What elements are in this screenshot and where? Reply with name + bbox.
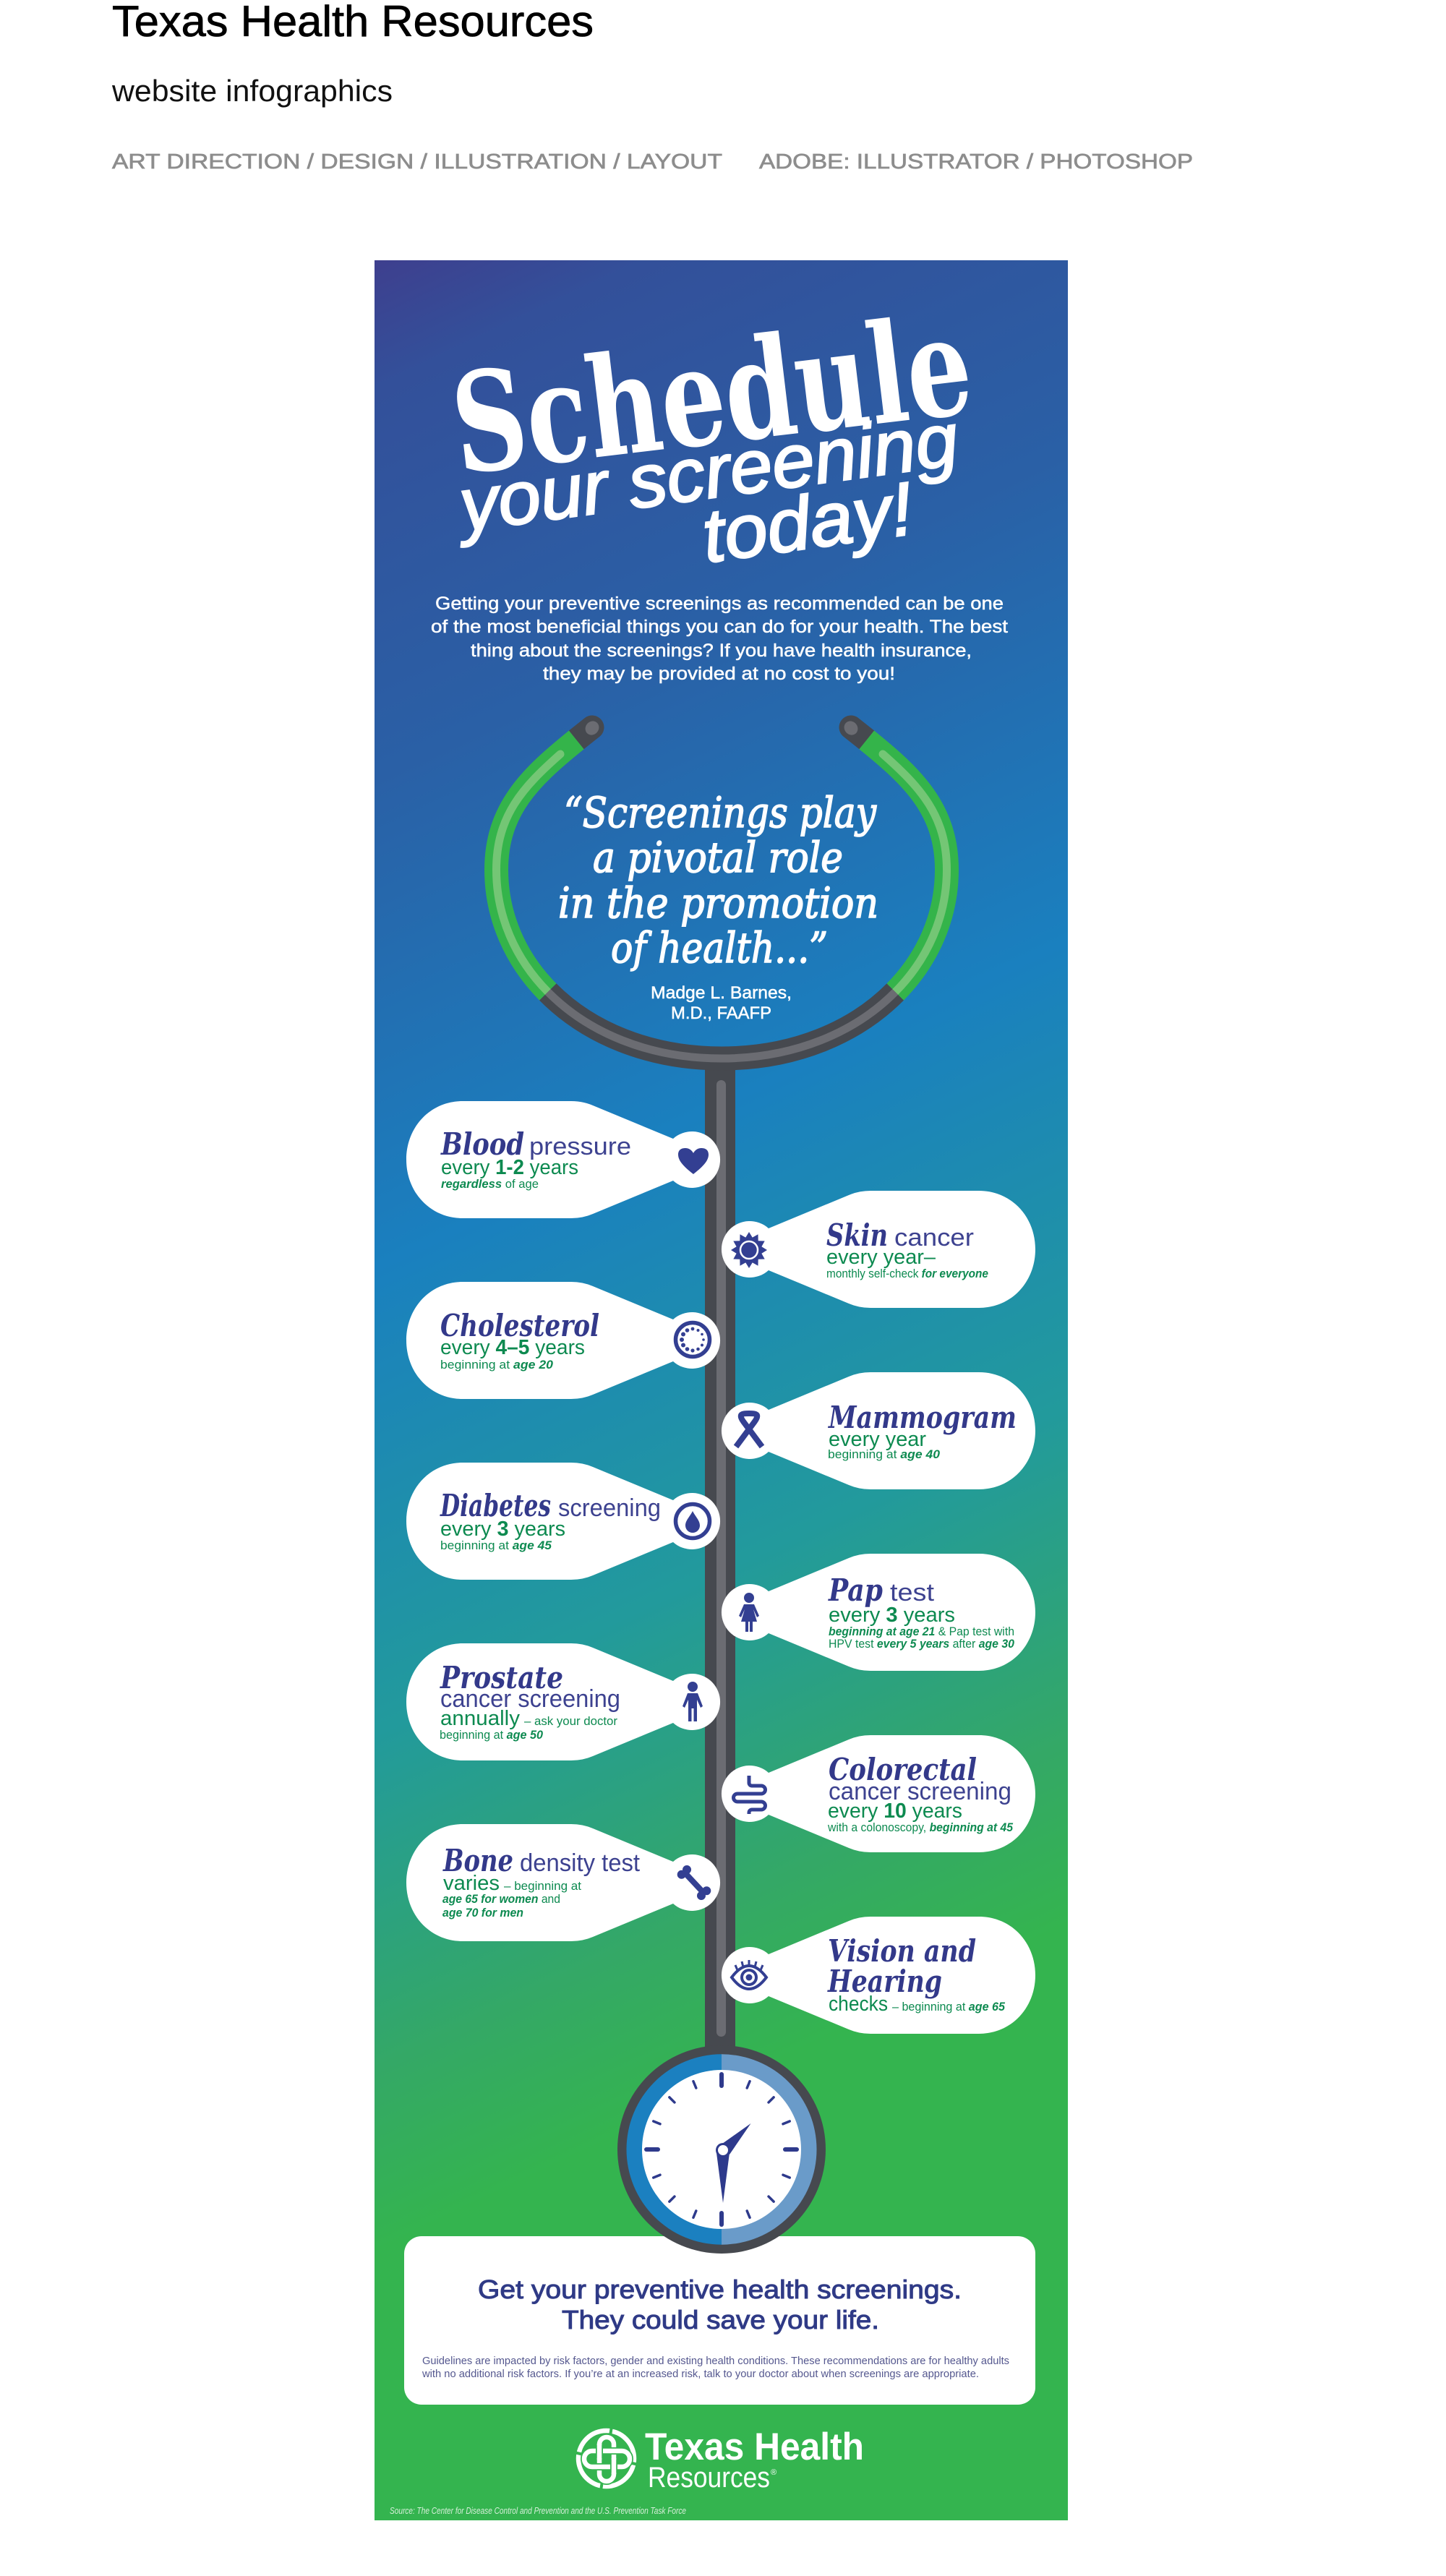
logo mark	[574, 2426, 638, 2491]
panel: Blood pressure	[406, 1101, 720, 1218]
intro paragraph: thing about the screenings? If you have health insurance,	[471, 641, 972, 661]
panel: Skin cancer	[722, 1191, 1035, 1308]
frequency: varies	[443, 1872, 500, 1895]
poster background	[375, 260, 1068, 2520]
icon: heart	[678, 1148, 709, 1174]
age note: with a colonoscopy, beginning at 45	[827, 1820, 1013, 1834]
age note: beginning at age 45	[440, 1539, 552, 1552]
subheading: cancer screening	[440, 1685, 620, 1713]
source note: Source: The Center for Disease Control and Prevention and the U.S. Prevention Task Force	[390, 2505, 686, 2516]
heading: cancer	[894, 1224, 974, 1251]
stethoscope tube	[496, 719, 947, 1058]
stem of stethoscope	[705, 1048, 735, 2061]
heading: Vision and	[828, 1933, 976, 1969]
logo text: ®	[771, 2468, 777, 2477]
heading	[826, 1218, 974, 1253]
panel: Cholesterol	[406, 1282, 720, 1399]
clock	[617, 2045, 826, 2254]
quote attribution: M.D., FAAFP	[671, 1004, 771, 1023]
heading: pressure	[529, 1133, 631, 1160]
headline: Schedule: Schedule	[444, 284, 980, 506]
heading	[442, 1843, 641, 1878]
heading: Colorectal	[829, 1752, 977, 1787]
frequency: – beginning at age 65	[892, 2000, 1006, 2014]
tools line: ADOBE: ILLUSTRATOR / PHOTOSHOP	[759, 150, 1193, 174]
icon: ribbon	[736, 1413, 762, 1447]
subheading: cancer screening	[829, 1778, 1011, 1805]
clock case	[617, 2045, 826, 2254]
heading: Hearing	[827, 1964, 942, 1999]
panel: Diabetes screening	[406, 1463, 720, 1580]
panel: Vision and Hearing	[722, 1917, 1035, 2034]
heading: screening	[558, 1494, 661, 1522]
frequency	[829, 1993, 1006, 2016]
frequency: every year	[829, 1428, 926, 1451]
frequency	[440, 1707, 617, 1730]
heading: Mammogram	[827, 1400, 1017, 1435]
age note: beginning at age 40	[828, 1447, 941, 1461]
clock face	[642, 2070, 801, 2229]
heading: density test	[520, 1849, 641, 1877]
poster headline	[444, 284, 980, 579]
intro paragraph	[431, 594, 1008, 684]
panel: Mammogram	[722, 1372, 1035, 1489]
age note: monthly self-check for everyone	[826, 1267, 988, 1280]
heading: Diabetes	[440, 1488, 551, 1523]
heading: Skin	[826, 1218, 888, 1253]
quote attribution	[651, 983, 792, 1023]
intro paragraph: Getting your preventive screenings as recommended can be one	[435, 594, 1004, 614]
quote: a pivotal role	[593, 833, 843, 882]
frequency: every 1-2 years	[441, 1156, 578, 1179]
clock hands	[716, 2123, 750, 2203]
icon: intestine	[733, 1776, 765, 1814]
quote	[558, 788, 878, 972]
subtitle: website infographics	[111, 74, 393, 108]
intro paragraph: of the most beneficial things you can do for your health. The best	[431, 617, 1008, 637]
icon: bone	[675, 1863, 713, 1902]
frequency	[443, 1872, 581, 1895]
logo text: Resources	[648, 2462, 770, 2494]
card fine print: with no additional risk factors. If you’re at an increased risk, talk to your doctor about when screenings are appropriate.	[422, 2369, 979, 2380]
panel: Prostate cancer screening	[406, 1643, 720, 1760]
age note: HPV test every 5 years after age 30	[829, 1637, 1014, 1651]
icon: blood drop	[675, 1504, 710, 1539]
age note	[829, 1625, 1014, 1651]
clock ticks	[646, 2074, 797, 2225]
heading: test	[890, 1579, 935, 1606]
logo text: Texas Health	[645, 2426, 864, 2468]
age note: beginning at age 50	[440, 1728, 544, 1742]
heading: Blood	[440, 1126, 524, 1162]
right side of tube	[722, 719, 947, 1058]
frequency: every 3 years	[440, 1518, 565, 1541]
frequency: every 4–5 years	[440, 1336, 585, 1359]
panel: Pap test	[722, 1554, 1035, 1671]
heading: Prostate	[440, 1660, 563, 1695]
icon: sun	[731, 1232, 767, 1268]
headline: today: today!	[697, 467, 917, 579]
frequency: annually	[440, 1707, 521, 1730]
age note	[442, 1892, 560, 1920]
frequency: every 3 years	[829, 1604, 955, 1627]
heading: Cholesterol	[440, 1308, 599, 1343]
heading	[828, 1572, 935, 1608]
card heading: Get your preventive health screenings.	[478, 2275, 962, 2304]
card heading	[478, 2275, 962, 2335]
quote: of health...”	[611, 923, 828, 972]
icon: woman	[739, 1593, 759, 1632]
frequency: checks	[829, 1993, 888, 2016]
headline: your screening: your screening	[450, 398, 963, 549]
panel: Bone density test	[406, 1824, 720, 1941]
heading: Bone	[442, 1843, 513, 1878]
left side of tube	[496, 719, 722, 1058]
frequency: every 10 years	[828, 1800, 962, 1823]
logo	[574, 2426, 864, 2494]
age note: age 70 for men	[442, 1906, 523, 1920]
age note: beginning at age 20	[440, 1358, 554, 1372]
frequency: – ask your doctor	[524, 1714, 617, 1728]
icon: eye	[732, 1960, 766, 1989]
frequency: – beginning at	[504, 1879, 581, 1893]
roles line: ART DIRECTION / DESIGN / ILLUSTRATION / LAYOUT	[112, 150, 722, 174]
age note: age 65 for women and	[442, 1892, 560, 1906]
clock ring	[626, 2054, 817, 2245]
icon: cholesterol artery	[675, 1323, 710, 1356]
age note: beginning at age 21 & Pap test with	[829, 1625, 1014, 1638]
quote: “Screenings play	[564, 788, 877, 837]
heading: Pap	[828, 1572, 883, 1608]
card fine print: Guidelines are impacted by risk factors, gender and existing health conditions. These recommendations are for healthy adults	[422, 2355, 1009, 2367]
logo text	[645, 2426, 864, 2494]
heading	[827, 1933, 976, 1999]
quote attribution: Madge L. Barnes,	[651, 983, 792, 1003]
frequency: every year–	[826, 1246, 936, 1269]
quote: in the promotion	[558, 878, 878, 928]
bottom card	[404, 2236, 1035, 2405]
card fine print	[422, 2355, 1009, 2380]
intro paragraph: they may be provided at no cost to you!	[543, 664, 895, 684]
icon: man	[683, 1682, 703, 1721]
heading	[440, 1126, 631, 1162]
card heading: They could save your life.	[562, 2305, 879, 2335]
age note: regardless of age	[441, 1177, 539, 1191]
panel: Colorectal cancer screening	[722, 1735, 1035, 1852]
heading	[440, 1488, 661, 1523]
